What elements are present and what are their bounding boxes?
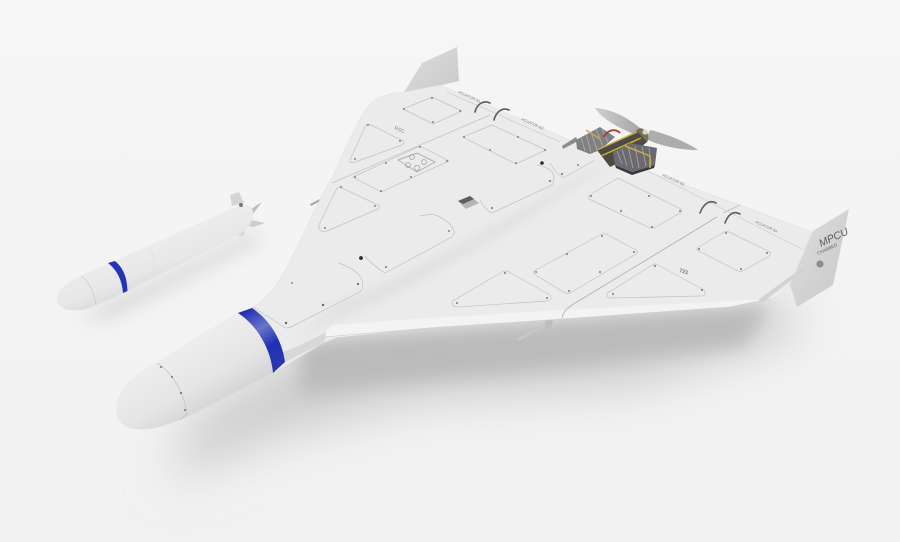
missile shadow bbox=[78, 232, 262, 318]
sensor dots bbox=[359, 161, 544, 260]
marking near left wing: RSC bbox=[393, 125, 406, 135]
tail fin emblem bbox=[816, 260, 824, 268]
nose cap seam with rivets bbox=[157, 363, 187, 420]
tail fin strut bbox=[758, 267, 806, 302]
yellow straps bbox=[586, 130, 641, 156]
missile body bbox=[57, 204, 253, 310]
wing rear stripe markings: ACUATOR B4 bbox=[755, 220, 778, 234]
hatch opening bbox=[458, 196, 479, 209]
propeller bbox=[595, 108, 698, 150]
wing lower edge bbox=[325, 299, 770, 337]
exposed engine section bbox=[562, 108, 698, 175]
panel number marking: 721 bbox=[678, 268, 689, 276]
neck lower shading bbox=[283, 330, 330, 362]
front strap bbox=[625, 146, 650, 168]
battery base bbox=[615, 165, 655, 175]
rear battery pack bbox=[576, 127, 615, 154]
engine core bbox=[597, 131, 647, 167]
missile tail fins bbox=[230, 192, 265, 236]
wing bright trailing strip bbox=[325, 299, 765, 337]
right wing rivets bbox=[456, 195, 768, 304]
red coil bbox=[604, 130, 620, 137]
missile body seam bbox=[150, 250, 154, 276]
missile blue band bbox=[108, 261, 128, 293]
neck access panel bbox=[253, 263, 363, 328]
panels on right wing bbox=[447, 92, 802, 318]
missile tail pin bbox=[239, 203, 243, 207]
wing rear stripe markings: ACUATOR B3 bbox=[662, 173, 685, 187]
wing rear stripe markings: ACUATOR B2 bbox=[521, 117, 544, 131]
missile bbox=[57, 192, 265, 310]
battery cell lines bbox=[617, 146, 651, 168]
nose section bbox=[117, 313, 273, 429]
hinge arm bbox=[723, 205, 740, 213]
tail fin sub text: CHABBED bbox=[816, 242, 839, 256]
drone airframe bbox=[117, 85, 812, 429]
missile nose seam bbox=[81, 276, 96, 305]
rear cell lines bbox=[581, 129, 608, 152]
actuator hooks bbox=[475, 102, 740, 223]
small stub left wing bbox=[310, 198, 322, 206]
right tail fin bbox=[758, 209, 851, 307]
drone ground shadow bbox=[170, 300, 800, 480]
left wing rivets bbox=[324, 97, 579, 268]
airframe silhouette bbox=[117, 85, 812, 429]
wing rear stripe markings: ACUATOR B1 bbox=[458, 90, 481, 104]
wing pylon under wing bbox=[516, 320, 553, 341]
wing rear stripe markings bbox=[458, 90, 778, 234]
front battery pack bbox=[613, 143, 657, 172]
rear tail fin left bbox=[403, 47, 459, 94]
fuselage shade bbox=[295, 165, 606, 340]
blue nose band bbox=[238, 308, 285, 373]
exhaust pipe bbox=[562, 137, 578, 149]
panel lines left wing bbox=[319, 97, 595, 273]
tail fin logo text: MPCU bbox=[817, 226, 851, 250]
